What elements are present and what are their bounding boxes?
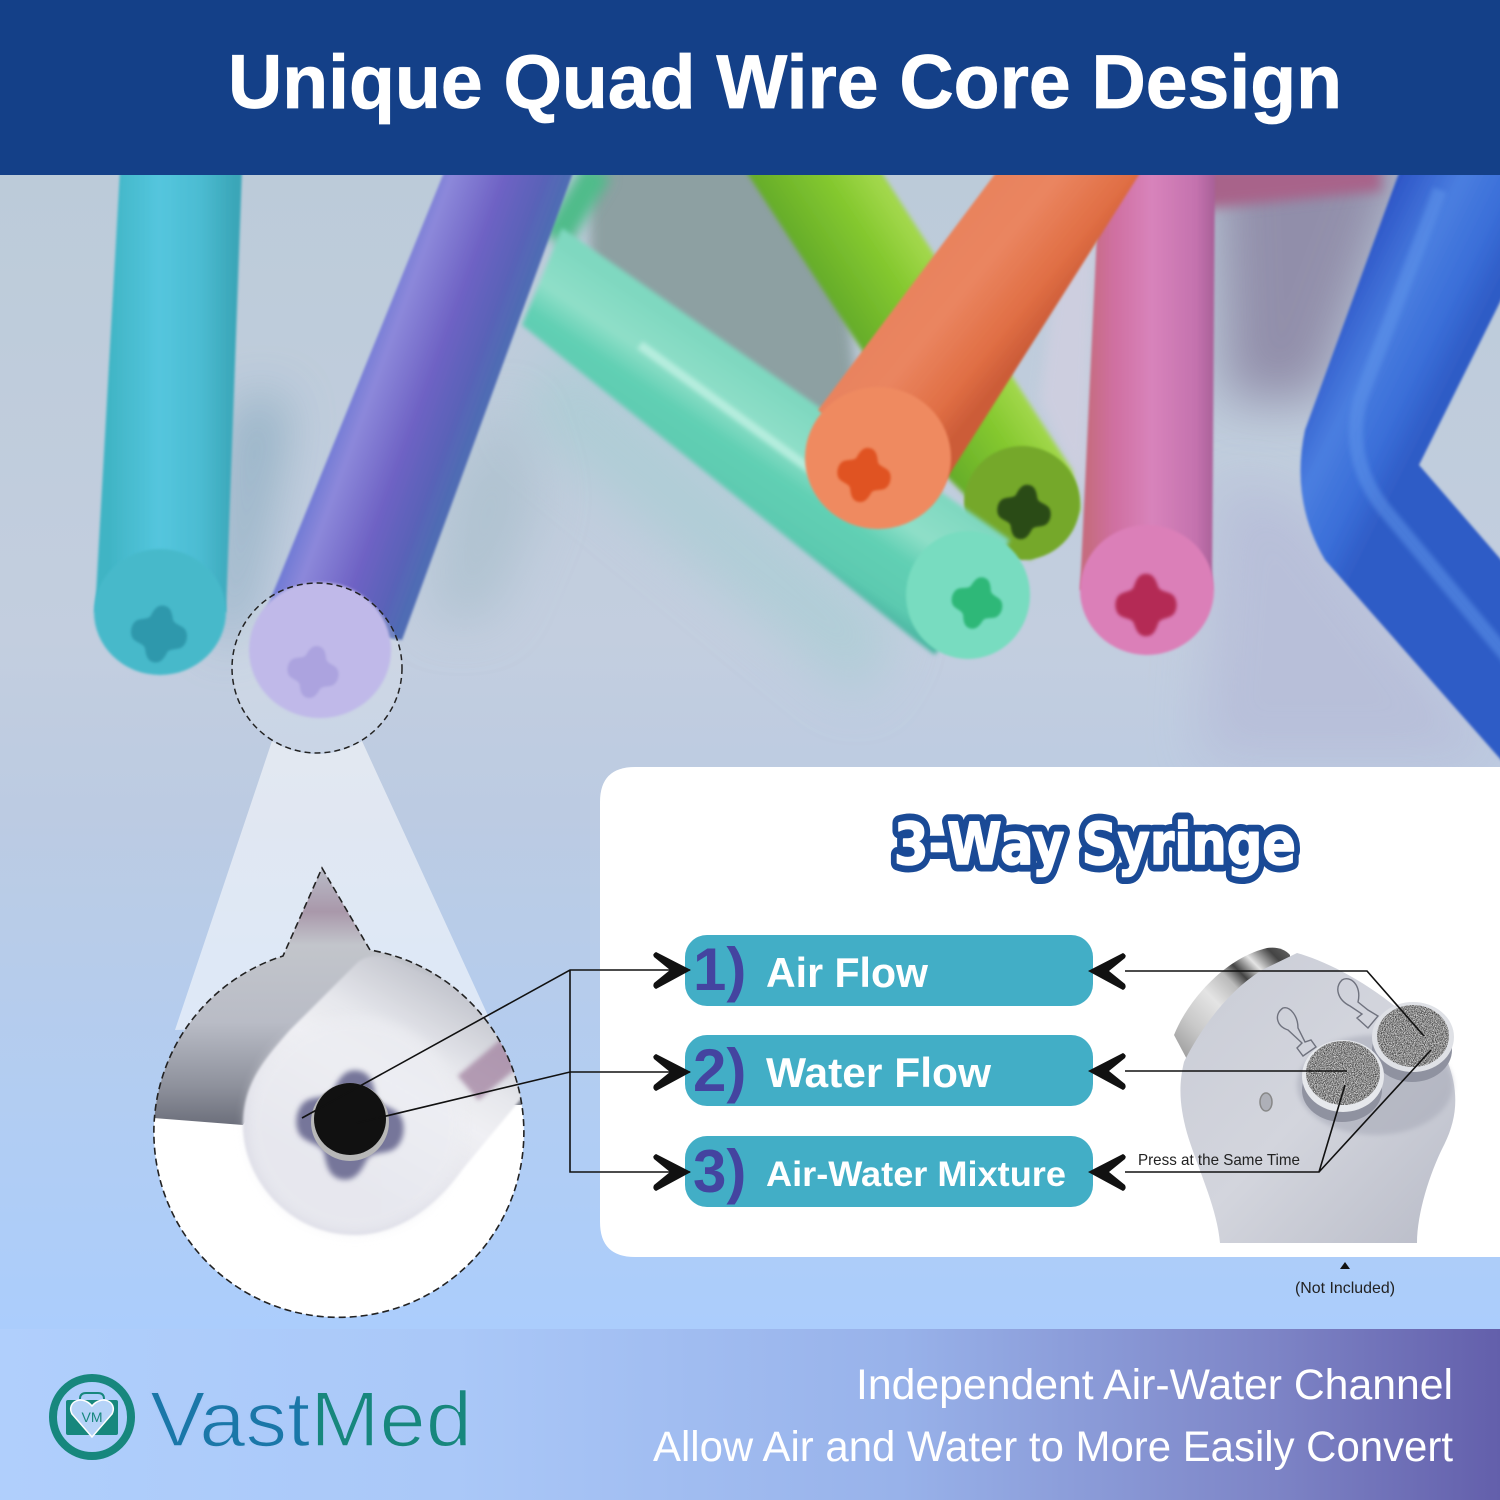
tube: mint [522, 228, 1030, 659]
tube: blue bend [1300, 170, 1500, 770]
tube: purple [249, 170, 574, 718]
note: not included: (Not Included) [1295, 1280, 1395, 1297]
magnifier: light cone [175, 741, 490, 1030]
photo: coloured tubes [94, 170, 1500, 770]
logo icon [53, 1378, 131, 1456]
magnified tube tip [140, 860, 530, 1317]
pill: air-water mixture: 3) [693, 1138, 746, 1205]
metal collar [1174, 948, 1290, 1065]
footer band [0, 1329, 1500, 1500]
tube: cyan [94, 170, 242, 675]
water symbol [1277, 1008, 1316, 1056]
syringe head illustration [1174, 948, 1455, 1243]
tube face highlight [240, 1048, 424, 1230]
tube body [243, 956, 530, 1235]
logo wordmark: VastMed [150, 1375, 472, 1463]
tube: green [745, 170, 1080, 560]
footer text [653, 1361, 1453, 1471]
tube: orange [805, 170, 1142, 529]
left connector lines and arrows [302, 952, 691, 1191]
white panel [600, 767, 1500, 1257]
title: Unique Quad Wire Core Design [228, 40, 1342, 125]
header band [0, 0, 1500, 175]
magnifier: dashed source circle [232, 583, 402, 753]
air symbol [1338, 979, 1378, 1028]
tube: rear bends [555, 170, 1380, 240]
panel heading: 3-Way Syringe [894, 810, 1296, 878]
pill: air flow: Air Flow [766, 949, 928, 996]
pill: air flow [685, 935, 1093, 1006]
label: press at the same time: Press at the Same Time [1138, 1152, 1300, 1169]
body [1180, 953, 1455, 1243]
recessed shadow around buttons [1297, 1035, 1453, 1135]
footer text: Independent Air-Water Channel [856, 1361, 1453, 1409]
hole [292, 1066, 408, 1184]
footer text: Allow Air and Water to More Easily Convert [653, 1423, 1453, 1471]
pill: air-water mixture: Air-Water Mixture [766, 1155, 1066, 1194]
panel heading: 3-Way Syringe [894, 810, 1296, 878]
pink reflection [468, 1040, 525, 1088]
button: water [1302, 1040, 1384, 1122]
pill: air-water mixture [685, 1136, 1093, 1207]
button: air [1372, 1002, 1454, 1082]
right connector lines and arrows [1088, 953, 1431, 1191]
pill: water flow: Water Flow [766, 1049, 991, 1096]
logo icon: VM [82, 1409, 102, 1425]
pill: water flow [685, 1035, 1093, 1106]
pill: water flow: 2) [693, 1037, 746, 1104]
small screw [1260, 1093, 1272, 1111]
photo background [0, 130, 1500, 1329]
tube: pink [1080, 170, 1215, 655]
note: not included [1295, 1262, 1395, 1297]
pill: air flow: 1) [693, 936, 746, 1003]
